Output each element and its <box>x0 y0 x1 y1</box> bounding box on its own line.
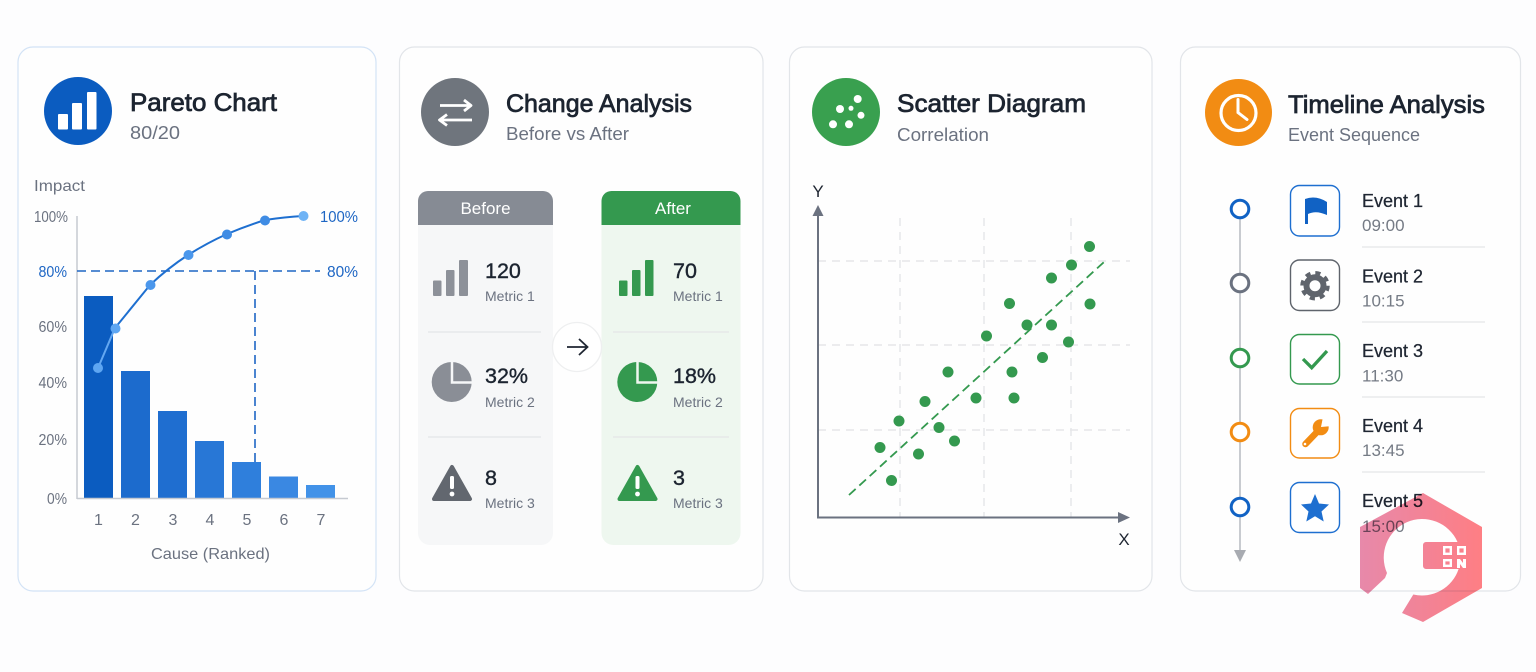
icon: scatter badge <box>812 78 880 146</box>
metric 3 after: Metric 3 <box>673 495 723 511</box>
event 5 <box>1231 482 1423 536</box>
right axis labels: 80% <box>327 264 358 281</box>
y axis title: Impact <box>34 178 86 195</box>
heading: Pareto Chart: Pareto Chart <box>130 89 277 117</box>
metric 2 before: 32% <box>485 364 528 388</box>
watermark QR mark <box>1444 547 1466 568</box>
icon: bar chart badge <box>44 77 112 145</box>
trend line <box>849 262 1104 495</box>
axes <box>812 205 1130 523</box>
timeline spine <box>1234 218 1246 562</box>
event 2: 10:15 <box>1362 292 1405 310</box>
subheading: Correlation: Correlation <box>897 125 989 145</box>
event 4: 13:45 <box>1362 441 1405 460</box>
heading: Timeline Analysis: Timeline Analysis <box>1288 91 1485 119</box>
metric 3 after <box>620 466 723 511</box>
y axis labels: 60% <box>38 319 67 336</box>
panel: Pareto chart <box>18 47 376 591</box>
event 1: Event 1 <box>1362 191 1423 211</box>
metric 2 after <box>617 361 723 410</box>
x axis tick labels: 6 <box>280 512 289 529</box>
event 1: 09:00 <box>1362 216 1405 235</box>
metric 2 after: 18% <box>673 364 716 388</box>
metric 2 before <box>432 361 535 410</box>
x axis tick labels: 5 <box>243 512 252 529</box>
metric 1 before: 120 <box>485 259 521 283</box>
y axis labels: 20% <box>38 432 67 449</box>
event 5: Event 5 <box>1362 491 1423 511</box>
metric 1 before <box>433 259 535 304</box>
metric 3 before <box>434 466 535 511</box>
x axis tick labels <box>94 512 326 529</box>
panel: Scatter diagram <box>790 47 1152 591</box>
column header: After: After <box>655 199 691 218</box>
x axis tick labels: 4 <box>206 512 215 529</box>
event 3: 11:30 <box>1362 366 1403 386</box>
metric 1 after <box>619 259 723 304</box>
subheading: Before vs After: Before vs After <box>506 124 629 144</box>
metric 3 after: 3 <box>673 466 685 490</box>
event 4: Event 4 <box>1362 416 1423 436</box>
metric 2 after: Metric 2 <box>673 394 723 410</box>
event 2 <box>1231 260 1423 310</box>
right axis labels: 100% <box>320 209 358 226</box>
scatter chart <box>812 182 1130 549</box>
arrow: before to after <box>552 322 602 372</box>
icon: swap arrows badge <box>421 78 489 146</box>
metric 1 after: Metric 1 <box>673 288 723 304</box>
panel: Change analysis <box>400 47 763 591</box>
column: Before <box>418 191 553 545</box>
metric 3 before: Metric 3 <box>485 495 535 511</box>
subheading: Event Sequence: Event Sequence <box>1288 125 1420 145</box>
y axis labels: 0% <box>47 491 67 508</box>
event 3: Event 3 <box>1362 341 1423 361</box>
column header: Before <box>418 191 553 225</box>
x axis tick labels: 1 <box>94 512 103 529</box>
heading: Change Analysis: Change Analysis <box>506 90 692 118</box>
y axis labels: 40% <box>38 375 67 392</box>
column header: Before: Before <box>460 199 511 218</box>
subheading: 80/20: 80/20 <box>130 123 180 143</box>
event 5: 15:00 <box>1362 517 1405 536</box>
cumulative line with points <box>93 211 308 373</box>
x axis tick labels: 2 <box>131 512 140 529</box>
metric 2 before: Metric 2 <box>485 394 535 410</box>
axis label X: X <box>1118 530 1130 549</box>
x axis tick labels: 3 <box>169 512 178 529</box>
right axis labels <box>320 209 358 281</box>
y axis labels: 100% <box>34 209 68 226</box>
y axis labels <box>34 209 68 508</box>
data points <box>874 241 1096 486</box>
axis label Y: Y <box>812 182 824 201</box>
metric 1 before: Metric 1 <box>485 288 535 304</box>
column: After <box>602 191 740 545</box>
metric 1 after: 70 <box>673 259 697 283</box>
y axis labels: 80% <box>38 264 67 281</box>
event 4 <box>1231 408 1423 460</box>
event 1 <box>1231 186 1423 236</box>
column header: After <box>602 191 740 225</box>
event 2: Event 2 <box>1362 266 1423 286</box>
chart axes <box>77 216 348 499</box>
heading: Scatter Diagram: Scatter Diagram <box>897 90 1086 118</box>
x axis tick labels: 7 <box>317 512 326 529</box>
bar chart: ranked causes <box>84 296 335 499</box>
80 percent threshold lines <box>77 271 320 462</box>
watermark badge <box>1360 493 1482 622</box>
panel: Timeline analysis <box>1180 47 1520 591</box>
icon: clock badge <box>1205 79 1272 146</box>
x axis title: Cause (Ranked) <box>151 546 270 563</box>
event 3 <box>1231 334 1423 386</box>
metric 3 before: 8 <box>485 466 497 490</box>
